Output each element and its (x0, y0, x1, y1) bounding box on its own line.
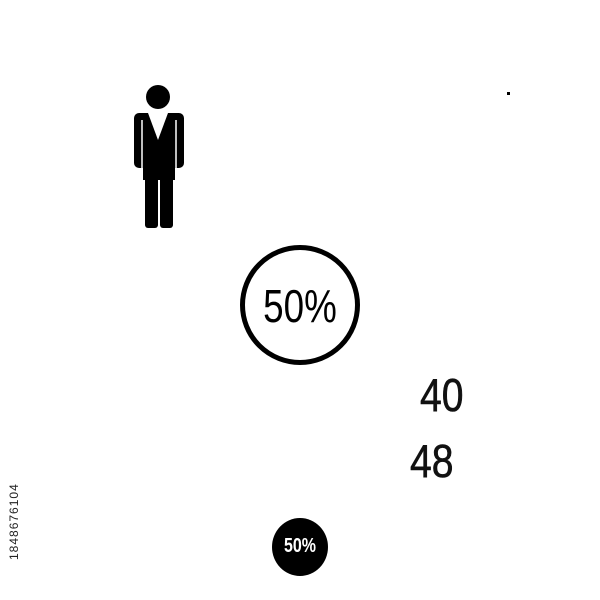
circle: 50% (240, 245, 360, 365)
side id text: 1848676104 (7, 483, 21, 560)
badge: black 50% blob: 50% (284, 535, 316, 557)
number 40: 40 (420, 369, 463, 421)
badge: black 50% blob (272, 518, 328, 576)
number 48: 48 (410, 435, 453, 487)
circle: 50%: 50% (263, 280, 337, 332)
dot (507, 92, 510, 95)
